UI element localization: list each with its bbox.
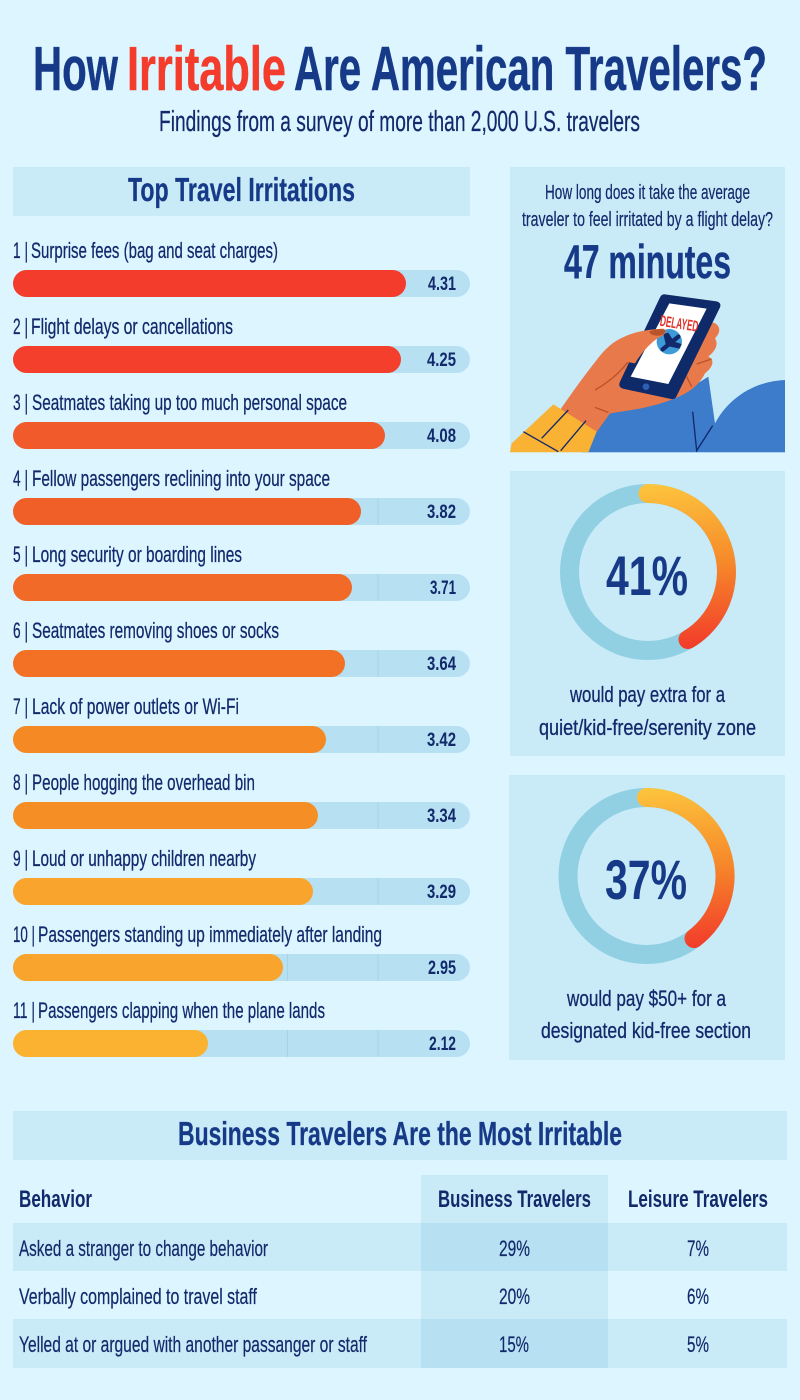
bar: overhead bin: 3.34 (427, 806, 456, 827)
caption (541, 986, 751, 1043)
row: complained to staff (19, 1284, 709, 1309)
bar: security lines: 3.71 (430, 578, 456, 599)
bar: power outlets (13, 694, 470, 753)
bar: children nearby: Loud or unhappy children nearby (32, 846, 256, 871)
value: 41%: 41% (606, 544, 688, 607)
bar: surprise fees: Surprise fees (bag and seat charges) (31, 238, 278, 263)
row: complained to staff: Verbally complained to travel staff (19, 1284, 258, 1309)
row: asked a stranger: Asked a stranger to change behavior (19, 1236, 268, 1261)
row: yelled or argued: Yelled at or argued with another passanger or staff (19, 1332, 368, 1357)
caption: would pay extra for a (569, 682, 725, 707)
panel: top travel irritations (13, 167, 470, 1057)
caption (539, 682, 756, 740)
caption: would pay $50+ for a (566, 986, 726, 1011)
row: complained to staff: 20% (499, 1284, 530, 1309)
bar: children nearby: 9 | (13, 846, 28, 871)
bar: surprise fees: 1 | (13, 238, 28, 263)
bar: shoes or socks (13, 618, 470, 677)
icon: hand holding phone showing delayed flight (510, 294, 785, 452)
bar: clapping: Passengers clapping when the plane lands (38, 998, 325, 1023)
bar: seatmates personal space: Seatmates taking up too much personal space (32, 390, 347, 415)
bar: reclining passengers: 3.82 (427, 502, 456, 523)
panel: 41 percent stat (510, 471, 785, 756)
bar: power outlets: 7 | (13, 694, 28, 719)
bar: children nearby (13, 846, 470, 905)
row: yelled or argued: 15% (499, 1332, 529, 1357)
table header: Behavior (19, 1186, 92, 1213)
bar: standing after landing: 2.95 (428, 958, 456, 979)
plane glyph (663, 333, 682, 349)
panel: 37 percent stat (509, 775, 785, 1060)
bar: shoes or socks: 3.64 (427, 654, 456, 675)
bar: overhead bin: People hogging the overhead bin (32, 770, 255, 795)
bar: reclining passengers: 4 | (13, 466, 28, 491)
bar: overhead bin (13, 770, 470, 829)
bar: security lines (13, 542, 470, 601)
title: How (33, 35, 119, 104)
heading band (13, 167, 470, 216)
bar: power outlets: 3.42 (427, 730, 456, 751)
panel: flight delay (510, 167, 785, 452)
bar: shoes or socks: 6 | (13, 618, 28, 643)
bar: flight delays (13, 314, 470, 373)
bar: flight delays: 4.25 (427, 350, 456, 371)
bar: flight delays: 2 | (13, 314, 28, 339)
panel: business travelers table (13, 1111, 787, 1368)
bar: seatmates personal space: 4.08 (427, 426, 456, 447)
heading band: Business Travelers Are the Most Irritable (178, 1115, 622, 1152)
bar: reclining passengers (13, 466, 470, 525)
table (13, 1175, 787, 1368)
bar: standing after landing (13, 922, 470, 981)
bar: seatmates personal space: 3 | (13, 390, 28, 415)
bar: reclining passengers: Fellow passengers reclining into your space (32, 466, 330, 491)
table header: Business Travelers (438, 1186, 591, 1213)
bar: flight delays: Flight delays or cancellations (31, 314, 233, 339)
bar: standing after landing: 10 | (13, 922, 35, 947)
question text (522, 182, 773, 231)
row: asked a stranger: 7% (687, 1236, 709, 1261)
row: asked a stranger: 29% (499, 1236, 530, 1261)
bar: overhead bin: 8 | (13, 770, 28, 795)
bar: seatmates personal space (13, 390, 470, 449)
bar: shoes or socks: Seatmates removing shoes or socks (32, 618, 279, 643)
bar: surprise fees (13, 238, 470, 297)
bar: clapping: 2.12 (429, 1034, 456, 1055)
row: yelled or argued: 5% (687, 1332, 709, 1357)
value: 37%: 37% (605, 848, 687, 911)
row: asked a stranger (19, 1236, 709, 1261)
donut chart: 41% (570, 494, 726, 650)
bar: clapping: 11 | (13, 998, 35, 1023)
bar: power outlets: Lack of power outlets or Wi-Fi (32, 694, 239, 719)
bar: security lines: Long security or boarding lines (32, 542, 242, 567)
title: Irritable (127, 35, 286, 104)
bar: clapping (13, 998, 470, 1057)
icon: hand holding phone showing delayed flight: DELAYED (659, 313, 700, 336)
donut chart: 37% (568, 798, 725, 954)
bar: children nearby: 3.29 (427, 882, 456, 903)
title (33, 35, 767, 104)
row: complained to staff: 6% (687, 1284, 709, 1309)
heading band (13, 1111, 787, 1160)
bar: security lines: 5 | (13, 542, 28, 567)
bar: surprise fees: 4.31 (428, 274, 456, 295)
bar: standing after landing: Passengers standing up immediately after landing (38, 922, 382, 947)
table header (19, 1186, 768, 1213)
heading band: Top Travel Irritations (128, 171, 355, 208)
